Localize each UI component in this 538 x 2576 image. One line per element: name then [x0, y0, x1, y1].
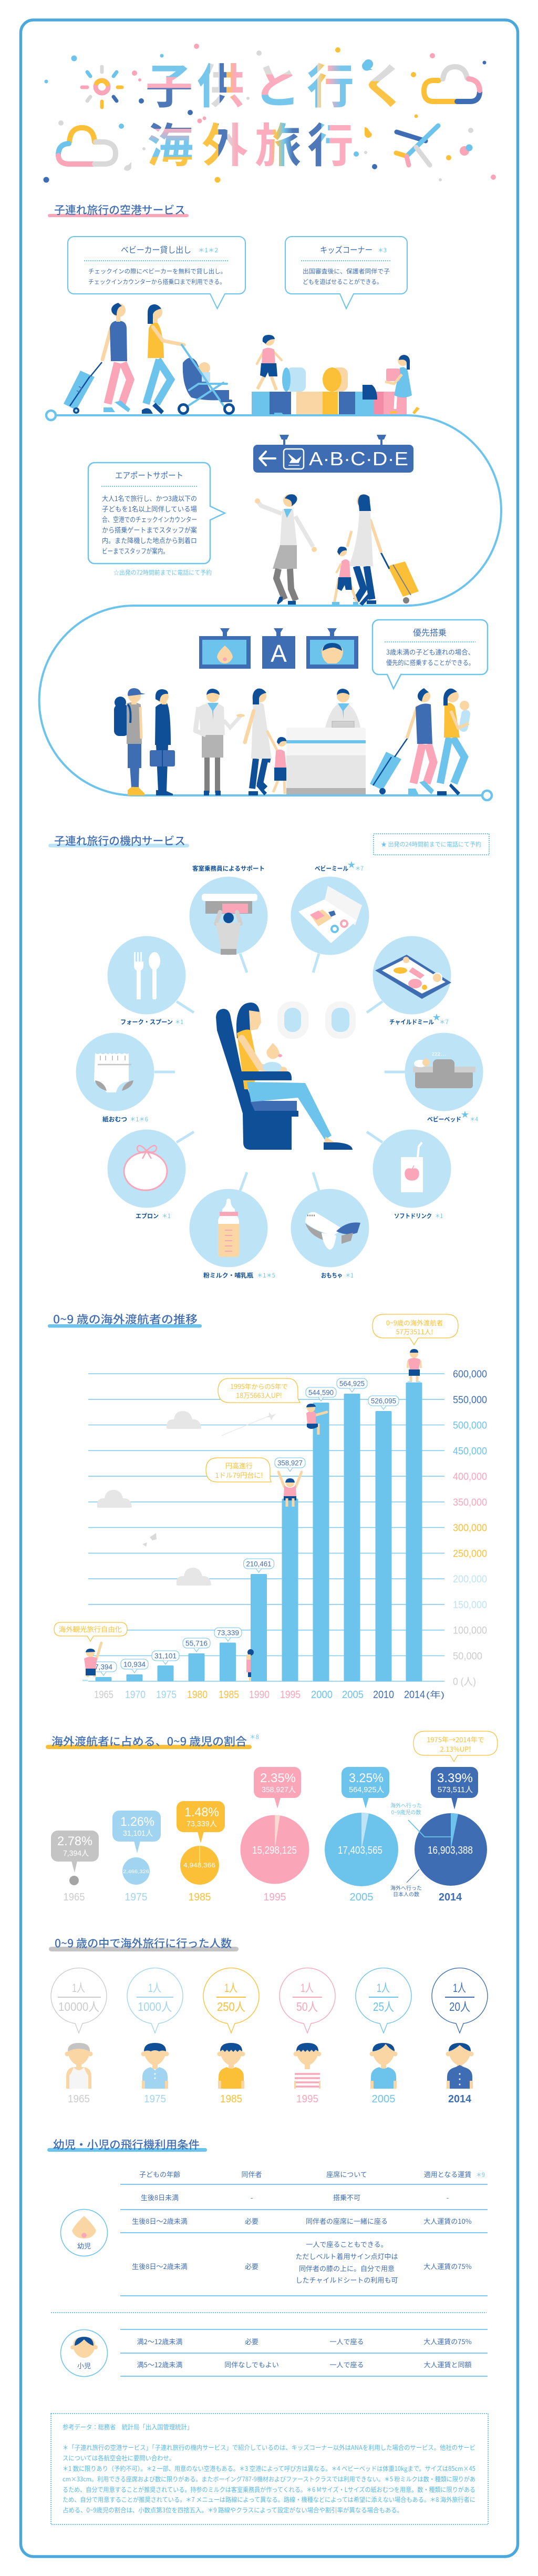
table row: under 2 on lap: 同伴者の座席に一緒に座る	[306, 2216, 388, 2226]
heading: travelers trend: 0~9 歳の海外渡航者の推移	[53, 1311, 198, 1327]
title: と	[253, 48, 301, 117]
item: toys: ＊1	[345, 1271, 354, 1280]
figure: kid waving 1965	[82, 1643, 101, 1681]
callout: airport support: 内。また降機した地点から到着ロ	[102, 535, 197, 545]
item: formula and bottle: 粉ミルク・哺乳瓶	[203, 1271, 254, 1280]
title: 行	[307, 48, 354, 117]
callout: 2014 total: 0~9歳の海外渡航者	[386, 1317, 443, 1327]
title	[146, 48, 408, 176]
bar chart: year labels: 1980	[187, 1689, 208, 1701]
title: 供	[197, 48, 244, 117]
figure: mother with child and yellow suitcase	[332, 494, 419, 606]
table row: under 2 on lap	[132, 2216, 472, 2226]
pie 1965: 1965	[63, 1892, 85, 1903]
person 1965	[51, 1968, 107, 2105]
title: 外	[202, 109, 248, 176]
annotation: all japanese travelers: 海外へ行った	[390, 1884, 422, 1892]
value label 55,716	[183, 1638, 210, 1652]
callout: stroller rental: ベビーカー貸し出し	[121, 243, 191, 255]
callout: 2.13% up: 1975年→2014年で	[427, 1734, 484, 1744]
item: child meal: チャイルドミール	[389, 1018, 434, 1026]
person 1985: 1985	[220, 2093, 242, 2105]
bar chart: grid lines and axis: 300,000	[453, 1523, 487, 1534]
table header row: ＊9	[476, 2171, 485, 2179]
table row: under 8 days: -	[447, 2192, 449, 2202]
table row: under 2 on lap: 大人運賃の10%	[423, 2216, 472, 2226]
callout: priority boarding: 優先的に搭乗することができる。	[386, 657, 474, 667]
item: soft drink	[373, 1129, 451, 1220]
sign: departure gates	[253, 435, 413, 473]
bar chart: year labels: 1965	[94, 1689, 113, 1701]
callout: airport support	[88, 463, 225, 564]
callout: kids corner: どもを遊ばせることができる。	[303, 278, 382, 286]
callout: stroller rental: ＊1＊2	[198, 246, 218, 254]
bar chart: year labels: 2000	[311, 1689, 333, 1701]
bar chart: year labels: 1985	[219, 1689, 239, 1701]
check-in counter	[286, 728, 366, 794]
bar chart: grid lines and axis	[88, 1369, 487, 1688]
item: child meal	[373, 936, 451, 1026]
pie 2014: 16,903,388	[428, 1845, 473, 1856]
annotation: all japanese travelers	[390, 1869, 422, 1898]
figure: airport staff	[255, 494, 317, 605]
pie 2014	[415, 1767, 487, 1903]
callout: kids corner: キッズコーナー	[320, 243, 373, 255]
figure: woman pushing stroller	[142, 304, 184, 414]
notes box: るため、自分で用意することが推奨されている。持参のミルクは客室乗務員が作ってくれる。＊6 Mサイズ・Lサイズの紙おむつを用意。数・種類に限りがある	[63, 2485, 475, 2494]
item: diapers: 紙おむつ	[102, 1115, 127, 1123]
figure: man with suitcase	[64, 303, 130, 414]
callout: 5-year rise: 1995年からの5年で	[230, 1381, 288, 1391]
annotation: all japanese travelers: 日本人の数	[393, 1890, 419, 1898]
callout: yen appreciation: 円高進行	[225, 1460, 253, 1470]
pie 1965: 7,394人	[63, 1849, 89, 1858]
item: soft drink: ソフトドリンク	[394, 1212, 432, 1220]
figure: kid climbing 2000 bar	[306, 1404, 327, 1435]
pie 2014: 3.39%	[437, 1771, 473, 1785]
icon: sun	[82, 67, 122, 107]
sign: adult icon	[306, 628, 358, 669]
pie 1995: 358,927人	[262, 1785, 296, 1794]
person 2005: 2005	[372, 2093, 395, 2105]
callout: 2.13% up	[413, 1731, 498, 1762]
heading: share of children: 海外渡航者に占める、0~9 歳児の割合	[51, 1733, 247, 1749]
person 2014: 20人	[449, 2000, 470, 2013]
bar chart: grid lines and axis: 0 (人)	[453, 1677, 476, 1688]
callout: stroller rental: チェックインの際にベビーカーを無料で貸し出し。	[88, 267, 226, 275]
item: fork and spoon: ＊1	[175, 1018, 183, 1026]
heading: flight conditions: 幼児・小児の飛行機利用条件	[53, 2137, 200, 2152]
table row: under 2 own seat: 必要	[245, 2261, 258, 2271]
pie 1975: 2,466,326	[123, 1869, 149, 1875]
figure: mother feeding baby in seat	[216, 1003, 353, 1150]
table rules	[120, 2184, 488, 2376]
person 1985: 1人	[224, 1981, 237, 1995]
bar chart: year labels	[94, 1689, 444, 1701]
callout: airport support: 子どもを1名以上同伴している場	[102, 504, 197, 514]
table header row: 同伴者	[241, 2169, 262, 2179]
figure: kid behind 1990 bar	[246, 1649, 254, 1681]
value label 10,934	[121, 1659, 148, 1673]
bar chart: year labels: 2014	[404, 1689, 425, 1701]
figure: check-in staff behind counter	[325, 689, 360, 728]
table row: age 2 to 12 with companion	[137, 2336, 472, 2346]
icon: cloud right	[424, 67, 480, 101]
value label 31,101: 31,101	[154, 1652, 177, 1660]
figure: mother and child at counter	[245, 689, 286, 795]
table header row: 子どもの年齢	[139, 2169, 180, 2179]
table row: age 5 to 12 alone: 一人で座る	[329, 2359, 364, 2369]
table row: age 2 to 12 with companion: 満2～12歳未満	[137, 2336, 182, 2346]
value label 7,394: 7,394	[95, 1662, 112, 1671]
callout: kids corner: ＊3	[378, 246, 387, 254]
pie 2005	[325, 1767, 398, 1903]
notes box: 参考データ：総務省 統計局「出入国管理統計」	[63, 2422, 193, 2431]
decorative confetti dots	[43, 44, 496, 183]
value label 358,927	[275, 1458, 305, 1471]
bar chart: year labels: 1975	[156, 1689, 177, 1701]
item: child meal: ＊7	[439, 1018, 449, 1026]
figure: traveler with backpack	[114, 688, 146, 795]
annotation: children who traveled	[390, 1801, 452, 1837]
callout: 5-year rise: 18万5663人UP!	[236, 1390, 282, 1400]
pie 2005: 17,403,565	[338, 1845, 382, 1856]
sign: letter A: A	[271, 640, 287, 667]
title: く	[360, 48, 408, 117]
bar chart: year labels: 1995	[280, 1689, 301, 1701]
pie 1985	[177, 1801, 225, 1903]
item: diapers: ＊1＊6	[130, 1115, 148, 1123]
person 1975	[127, 1968, 183, 2105]
person 1965: 1人	[72, 1981, 85, 1995]
pie 1985: 73,339人	[187, 1819, 217, 1828]
item: bib: エプロン	[136, 1212, 159, 1220]
figure: boy on blocks	[257, 334, 282, 390]
title: 行	[307, 109, 354, 176]
figure: family with blue suitcase	[370, 688, 471, 795]
bar chart: grid lines and axis: 50,000	[453, 1651, 482, 1662]
bar chart: year labels: 2010	[373, 1689, 394, 1701]
value label 526,095: 526,095	[371, 1396, 396, 1405]
notes box: ため、自分で用意することが推奨されている。＊7 メニューは路線によって異なる。路線・機種などによっては希望に添えない場合もある。＊8 海外旅行者に	[63, 2495, 475, 2504]
table row: age 2 to 12 with companion: 必要	[245, 2336, 258, 2346]
pie 2005: 2005	[350, 1892, 373, 1903]
pie 1975: 1975	[125, 1892, 147, 1903]
table row: under 2 own seat	[132, 2239, 472, 2285]
value label 73,339: 73,339	[217, 1629, 239, 1637]
note: 72 hours reservation: ☆出発の72時間前までに電話にて予約	[113, 568, 212, 577]
item: toys: おもちゃ	[321, 1271, 343, 1280]
figure: kid on 2014 bar	[408, 1349, 421, 1383]
title: 海	[147, 109, 193, 176]
person 1995: 1995	[296, 2093, 318, 2105]
icon: infant	[61, 2209, 107, 2256]
pie 1995: 15,298,125	[252, 1845, 297, 1856]
table row: age 5 to 12 alone: 満5～12歳未満	[137, 2359, 182, 2369]
item: baby bed: zzz…	[432, 1051, 447, 1057]
table header row	[139, 2169, 485, 2179]
table row: under 8 days	[141, 2192, 449, 2202]
notes box: ＊1 数に限りあり（予約不可）。＊2 一部、用意のない空港もある。＊3 空港によって呼び方は異なる。＊4 ベビーベッドは体重10kgまで。サイズは85cm×45	[63, 2464, 475, 2473]
heading: airport services: 子連れ旅行の空港サービス	[54, 202, 185, 218]
person 1995: 50人	[296, 2000, 318, 2013]
legend: 24 hours reservation	[374, 834, 489, 855]
figure: girl carrying box	[385, 355, 420, 414]
table row: under 2 own seat: したチャイルドシートの利用も可	[296, 2275, 398, 2285]
callout: kids corner: 出国審査後に、保護者同伴で子	[303, 267, 390, 275]
bar chart: grid lines and axis: 600,000	[453, 1369, 487, 1380]
item: baby bed: ★	[461, 1109, 469, 1120]
item: baby bed: ベビーベッド	[427, 1115, 461, 1123]
value label 544,590	[306, 1387, 336, 1401]
item: fork and spoon: フォーク・スプーン	[120, 1018, 173, 1026]
bar chart: grid lines and axis: 550,000	[453, 1395, 487, 1406]
bar chart: grid lines and axis: 150,000	[453, 1600, 487, 1611]
bar chart: year labels: 1990	[249, 1689, 270, 1701]
person 1995: 1人	[301, 1981, 314, 1995]
annotation: children who traveled: 0~9歳児の数	[391, 1808, 421, 1816]
table row: under 8 days: 生後8日未満	[141, 2192, 179, 2202]
pie 1965	[51, 1831, 99, 1903]
annotation: children who traveled: 海外へ行った	[390, 1801, 422, 1809]
item: cabin crew support	[189, 864, 268, 955]
person 2005: 25人	[373, 2000, 394, 2013]
table row: under 2 own seat: 大人運賃の75%	[423, 2261, 472, 2271]
figure: businessman	[150, 689, 175, 795]
callout: priority boarding: 優先搭乗	[413, 626, 447, 638]
value label 31,101	[152, 1651, 179, 1664]
pie 1975	[112, 1811, 161, 1903]
table row: under 8 days: 搭乗不可	[333, 2192, 360, 2202]
item: baby bed: ＊4	[470, 1115, 479, 1123]
callout: overseas travel liberalized: 海外観光旅行自由化	[59, 1624, 122, 1634]
item: toys	[291, 1189, 369, 1280]
callout: airport support: から搭乗ゲートまでスタッフが案	[102, 525, 197, 535]
notes box: 占める、0~9歳児の割合は、小数点第3位を四捨五入。＊9 路線やクラスによって設定がない場合や割引率が異なる場合もある。	[63, 2506, 403, 2514]
item: child meal: ★	[432, 1011, 441, 1023]
value label 358,927: 358,927	[277, 1458, 303, 1467]
table row: under 2 own seat: 一人で座ることもできる。	[306, 2239, 388, 2249]
value label 544,590: 544,590	[308, 1388, 334, 1396]
connector lines	[154, 954, 405, 1191]
table row: under 8 days: -	[251, 2192, 253, 2202]
person 1985	[203, 1968, 259, 2105]
item: bib	[107, 1129, 186, 1220]
person 1995	[280, 1968, 335, 2105]
item: bib: ＊1	[162, 1212, 171, 1220]
table header row: 適用となる運賃	[424, 2169, 471, 2179]
heading: share of children: ＊8	[250, 1733, 259, 1741]
pie 2014: 573,511人	[438, 1785, 473, 1794]
bar chart: grid lines and axis: 500,000	[453, 1420, 487, 1431]
background decorations: clouds plane birds	[97, 1411, 276, 1586]
title: 子	[146, 48, 193, 117]
value label 73,339	[214, 1628, 242, 1641]
pie 1975: 31,101人	[123, 1829, 153, 1838]
callout: 5-year rise	[218, 1378, 300, 1403]
callout: airport support: エアポートサポート	[115, 468, 183, 481]
sign: letter A	[262, 628, 295, 669]
item: baby meal	[291, 859, 369, 955]
callout: 2.13% up: 2.13%UP!	[440, 1744, 471, 1754]
callout: yen appreciation	[206, 1458, 271, 1482]
heading: in-flight services: 子連れ旅行の機内サービス	[54, 833, 185, 849]
person 2005: 1人	[377, 1981, 390, 1995]
sign: departure gates: A·B·C·D·E	[309, 448, 408, 469]
pie 1965: 2.78%	[57, 1834, 92, 1848]
person 1975: 1000人	[138, 2000, 172, 2013]
pie 1985: 1985	[188, 1892, 211, 1903]
table row: age 2 to 12 with companion: 一人で座る	[329, 2336, 364, 2346]
person 1975: 1975	[144, 2093, 166, 2105]
notes box	[51, 2414, 488, 2524]
callout: yen appreciation: 1ドル79円台に!	[215, 1470, 263, 1480]
value label 55,716: 55,716	[185, 1639, 208, 1648]
icon: infant: 幼児	[77, 2241, 91, 2251]
callout: airport support: ビーまでスタッフが案内。	[102, 546, 169, 556]
person 1965: 10000人	[58, 2000, 99, 2013]
heading: number of children: 0~9 歳の中で海外旅行に行った人数	[55, 1935, 232, 1951]
callout: 2014 total: 57万3511人!	[396, 1326, 433, 1336]
person 1975: 1人	[148, 1981, 161, 1995]
bar chart: grid lines and axis: 250,000	[453, 1548, 487, 1559]
table row: age 2 to 12 with companion: 大人運賃の75%	[423, 2336, 472, 2346]
person 1985: 250人	[217, 2000, 245, 2013]
person 2014: 2014	[448, 2093, 472, 2105]
table row: under 2 on lap: 生後8日～2歳未満	[132, 2216, 188, 2226]
icon: plane end mark	[396, 126, 438, 165]
callout: 2014 total	[373, 1314, 458, 1345]
pie 1985: 4,948,366	[183, 1862, 215, 1869]
pie 2014: 2014	[439, 1892, 462, 1903]
item: formula and bottle: ＊1＊5	[257, 1271, 275, 1280]
table row: under 2 own seat: 生後8日～2歳未満	[132, 2261, 188, 2271]
notes box: ＊「子連れ旅行の空港サービス」「子連れ旅行の機内サービス」で紹介しているのは、キッズコーナー以外はANAを利用した場合のサービス。他社のサービ	[63, 2443, 475, 2452]
figure: kids corner blocks	[252, 367, 407, 415]
pie 2005: 3.25%	[349, 1771, 384, 1785]
callout: stroller rental: チェックインカウンターから搭乗口まで利用できる。	[88, 278, 225, 286]
notes box: cm×33cm。利用できる座席および数に限りがある。またボーイング787-9機材およびファーストクラスでは利用できない。＊5 粉ミルクは数・種類に限りがあ	[63, 2475, 475, 2483]
callout: kids corner	[285, 237, 407, 309]
person 2014: 1人	[453, 1981, 466, 1995]
callout: overseas travel liberalized	[54, 1622, 127, 1641]
bar chart: bars	[96, 1383, 422, 1681]
bar chart: grid lines and axis: 200,000	[453, 1574, 487, 1585]
table row: age 5 to 12 alone: 同伴なしでもよい	[224, 2359, 279, 2369]
item: cabin crew support: 客室乗務員によるサポート	[192, 864, 265, 873]
value label 10,934: 10,934	[123, 1660, 146, 1669]
value label 564,925: 564,925	[339, 1379, 365, 1388]
pie 2005: 564,925人	[349, 1785, 384, 1794]
pie 1995	[241, 1767, 309, 1903]
icon: cloud left	[58, 128, 116, 164]
value label 564,925	[337, 1378, 367, 1392]
callout: stroller rental	[68, 237, 245, 309]
person 2005	[356, 1968, 411, 2105]
item: diapers	[76, 1033, 154, 1123]
bar chart: grid lines and axis: 350,000	[453, 1497, 487, 1508]
title: 旅	[255, 109, 301, 176]
figure: kid sitting on 1995 bar	[278, 1472, 302, 1507]
icon: child	[61, 2330, 107, 2376]
value label 210,461	[244, 1559, 274, 1572]
cabin windows	[277, 1001, 356, 1039]
table row: under 2 on lap: 必要	[245, 2216, 258, 2226]
pie 1975: 1.26%	[120, 1815, 154, 1829]
route line	[39, 411, 501, 800]
table row: under 2 own seat: ただしベルト着用サイン点灯中は	[295, 2251, 398, 2261]
sign: baby icon	[199, 628, 251, 669]
pie 1995: 2.35%	[260, 1771, 296, 1785]
dotted divider	[51, 2312, 487, 2313]
pie 1995: 1995	[264, 1892, 286, 1903]
table header row: 座席について	[326, 2169, 367, 2179]
table row: age 5 to 12 alone	[137, 2359, 472, 2369]
callout: airport support: 大人1名で旅行し、かつ3歳以下の	[102, 493, 197, 503]
callout: priority boarding: 3歳未満の子ども連れの場合、	[386, 647, 474, 657]
person 2014	[432, 1968, 488, 2105]
bar chart: year labels: (年)	[426, 1690, 444, 1700]
item: baby meal: ★	[347, 859, 356, 870]
figure: stroller with baby	[179, 345, 233, 413]
item: soft drink: ＊1	[435, 1212, 443, 1220]
bar chart: grid lines and axis: 100,000	[453, 1626, 487, 1637]
item: fork and spoon	[107, 936, 186, 1026]
value label 7,394	[90, 1662, 117, 1675]
callout: airport support: 合、空港でのチェックインカウンター	[102, 514, 197, 524]
value label 210,461: 210,461	[246, 1559, 272, 1568]
legend: 24 hours reservation: ★ 出発の24時間前までに電話にて予約	[381, 840, 481, 849]
bar chart: grid lines and axis: 450,000	[453, 1446, 487, 1457]
bar chart: grid lines and axis: 400,000	[453, 1471, 487, 1483]
figure: gate staff	[195, 689, 245, 795]
item: baby meal: ＊7	[355, 864, 364, 873]
item: baby meal: ベビーミール	[315, 864, 348, 873]
item: baby bed	[405, 1033, 483, 1123]
person 1965: 1965	[68, 2093, 90, 2105]
table row: under 2 own seat: 同伴者の膝の上に。自分で用意	[299, 2263, 395, 2273]
notes box: スについては各航空会社に要問い合わせ。	[63, 2454, 175, 2462]
pie 1985: 1.48%	[184, 1805, 219, 1819]
bar chart: year labels: 2005	[342, 1689, 364, 1701]
callout: priority boarding	[373, 620, 488, 689]
table row: age 5 to 12 alone: 大人運賃と同額	[423, 2359, 472, 2369]
icon: child: 小児	[77, 2360, 91, 2370]
bar chart: year labels: 1970	[125, 1689, 146, 1701]
item: formula and bottle	[189, 1189, 275, 1280]
value label 526,095	[368, 1396, 399, 1409]
